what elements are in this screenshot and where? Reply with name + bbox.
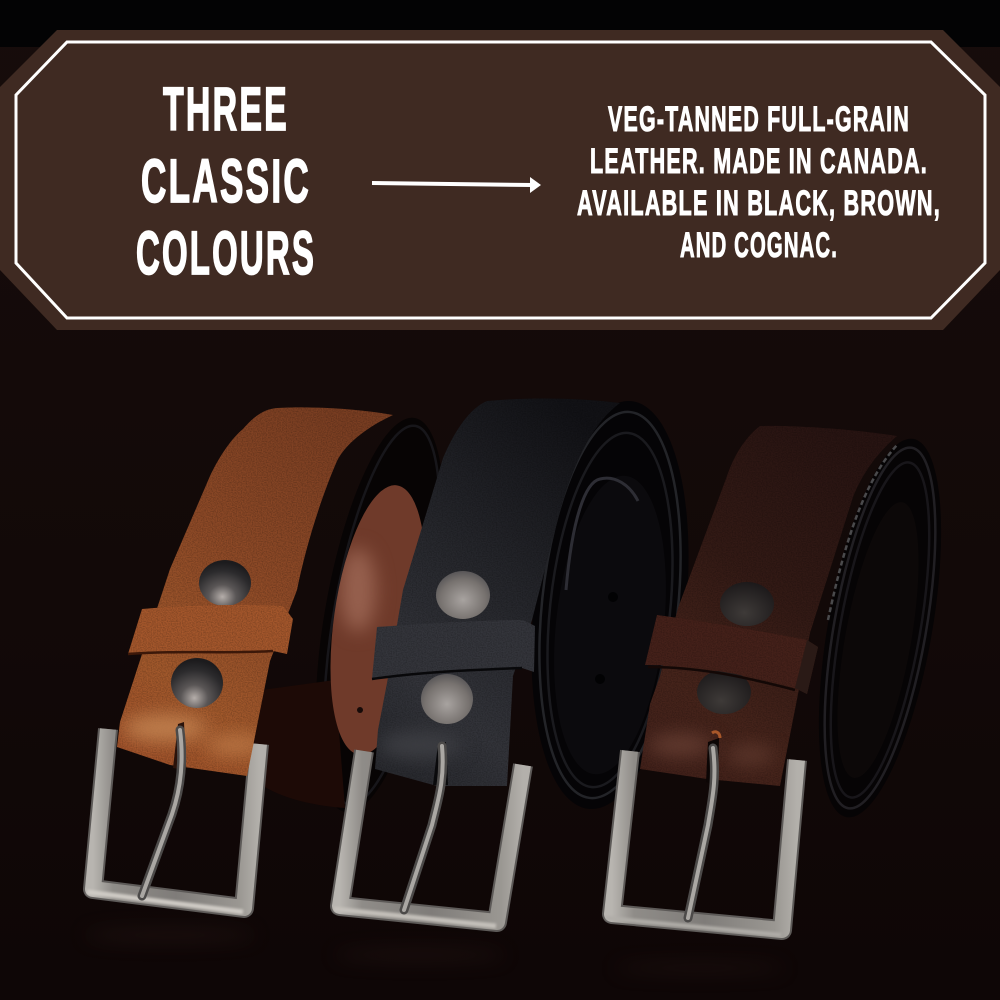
description text: AND COGNAC. [680, 226, 838, 265]
buckle frame [334, 751, 523, 926]
rivet upper [720, 582, 774, 626]
rivet upper [436, 571, 490, 619]
keeper loop [372, 620, 535, 679]
arrow [372, 177, 541, 193]
buckle pin [404, 746, 443, 910]
keeper loop [645, 615, 818, 694]
title: CLASSIC [141, 147, 311, 215]
panel white border [16, 42, 985, 318]
buckle frame [87, 729, 259, 912]
rivet lower [171, 658, 223, 708]
title: THREE [163, 75, 289, 143]
rivet upper [199, 560, 251, 606]
pin slot [433, 742, 448, 785]
title: COLOURS [136, 219, 316, 287]
rivet lower [421, 674, 473, 724]
table reflections [85, 928, 785, 973]
buckle pin [142, 730, 182, 896]
pin slot [173, 722, 186, 770]
black belt [334, 393, 707, 926]
dark brown belt [606, 426, 965, 935]
buckle frame [606, 751, 797, 935]
cognac belt [87, 407, 469, 912]
pin slot [706, 738, 719, 786]
belts photo [85, 393, 965, 973]
title [136, 75, 316, 287]
buckle pin [688, 748, 714, 918]
keeper loop [128, 605, 293, 654]
rivet lower [697, 670, 751, 714]
header panel [0, 30, 1000, 330]
description text [577, 100, 941, 265]
